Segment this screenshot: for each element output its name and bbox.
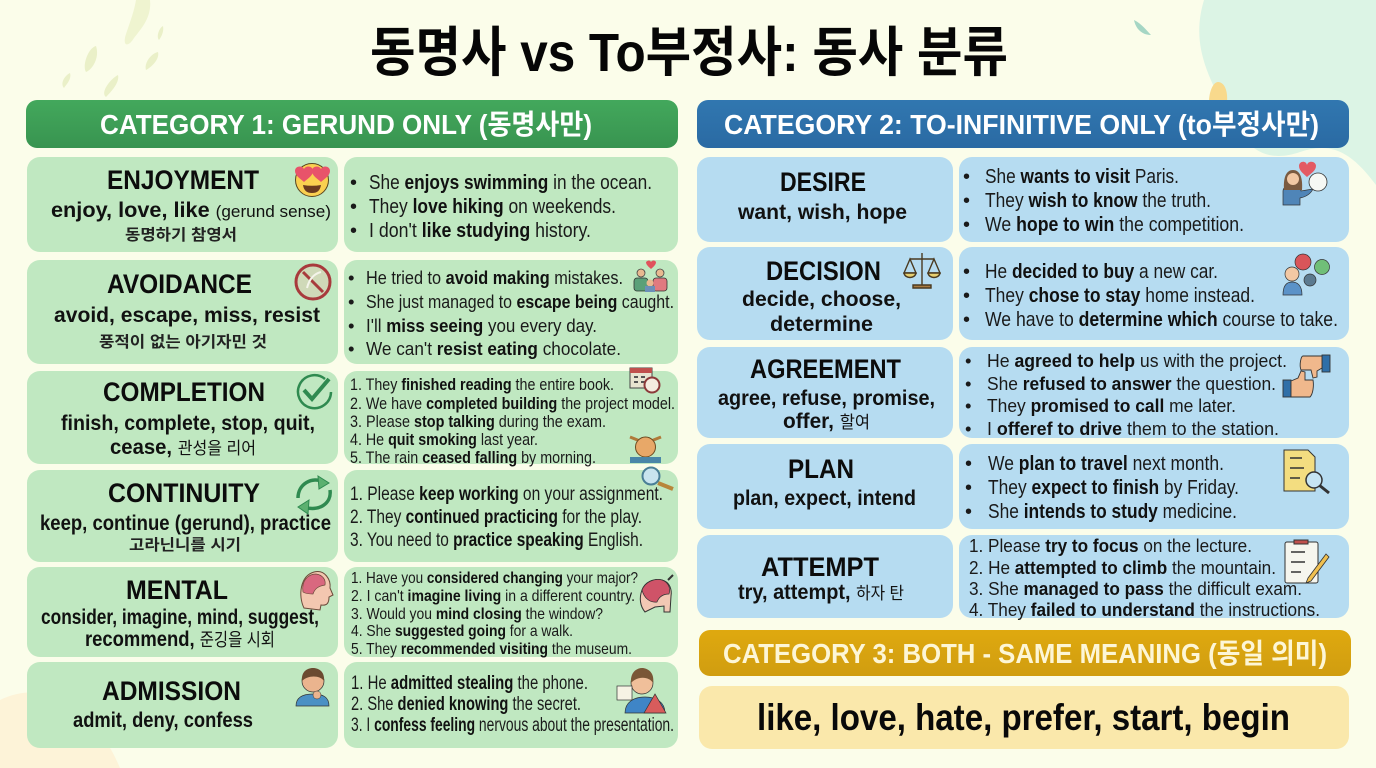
- row: enjoyment: I don't like studying history.: [369, 220, 591, 242]
- row: desire: •: [963, 214, 970, 236]
- row: admission: [27, 662, 678, 748]
- row: agreement: •: [965, 418, 971, 439]
- icon: clipboard and pencil: [1285, 540, 1329, 583]
- row: continuity: CONTINUITY: [108, 478, 260, 508]
- row: enjoyment: She enjoys swimming in the ocean.: [369, 172, 652, 194]
- row: decision: determine: [770, 312, 873, 336]
- row: desire: She wants to visit Paris.: [985, 166, 1179, 188]
- icon: brain head right: [640, 575, 673, 612]
- category 3 header: CATEGORY 3: BOTH - SAME MEANING (동일 의미): [723, 638, 1327, 669]
- row: admission: 2. She denied knowing the secret.: [351, 694, 581, 715]
- row: enjoyment: enjoy, love, like (gerund sense): [51, 198, 331, 222]
- icon: alarm figure: [630, 437, 661, 463]
- row: mental: 4. She suggested going for a walk.: [351, 623, 573, 640]
- row: agreement: She refused to answer the question.: [987, 373, 1276, 394]
- row: attempt: 1. Please try to focus on the lecture.: [969, 535, 1252, 556]
- icon: checklist with magnifier: [1284, 450, 1329, 493]
- row: continuity: [27, 468, 678, 562]
- row: mental: 2. I can't imagine living in a different country.: [351, 588, 635, 605]
- title: 동명사 vs To부정사: 동사 분류: [370, 23, 1008, 83]
- row: desire: [697, 157, 1349, 242]
- row: plan: We plan to travel next month.: [988, 453, 1224, 475]
- row: continuity: 1. Please keep working on your assignment.: [350, 484, 663, 505]
- row: attempt: [697, 535, 1349, 620]
- row: decision: •: [963, 285, 970, 307]
- panel: category 1 gerund only: [26, 100, 678, 748]
- row: mental: 3. Would you mind closing the window?: [351, 606, 603, 623]
- row: decision: [697, 247, 1349, 340]
- row: avoidance: He tried to avoid making mistakes.: [366, 267, 623, 288]
- row: agreement: AGREEMENT: [750, 354, 901, 384]
- row: plan: •: [965, 477, 972, 499]
- icon: person with choice marks: [1283, 254, 1330, 295]
- row: attempt: ATTEMPT: [761, 552, 879, 582]
- icon: man with note: [617, 668, 666, 713]
- row: plan: plan, expect, intend: [733, 486, 916, 510]
- category 3 header: [699, 630, 1351, 676]
- row: mental: 5. They recommended visiting the museum.: [351, 641, 632, 658]
- row: completion: COMPLETION: [103, 377, 265, 407]
- row: enjoyment: They love hiking on weekends.: [369, 196, 616, 218]
- row: avoidance: AVOIDANCE: [107, 269, 252, 299]
- row: agreement: [697, 347, 1349, 439]
- row: admission: 1. He admitted stealing the phone.: [351, 673, 588, 694]
- row: mental: consider, imagine, mind, suggest,: [41, 605, 319, 629]
- row: completion: finish, complete, stop, quit,: [61, 411, 315, 435]
- row: completion: 5. The rain ceased falling by morning.: [350, 448, 596, 467]
- row: desire: DESIRE: [780, 167, 866, 197]
- row: enjoyment: •: [350, 196, 357, 218]
- icon: magnifying glass: [642, 468, 673, 489]
- row: desire: We hope to win the competition.: [985, 214, 1244, 236]
- row: avoidance: She just managed to escape being caught.: [366, 291, 674, 312]
- row: completion: 2. We have completed building the project model.: [350, 394, 675, 413]
- icon: balance scale: [904, 253, 940, 288]
- row: avoidance: We can't resist eating chocolate.: [366, 338, 621, 359]
- row: completion: 4. He quit smoking last year.: [350, 430, 538, 449]
- row: attempt: 4. They failed to understand the instructions.: [969, 599, 1320, 620]
- row: agreement: •: [965, 395, 971, 416]
- row: enjoyment: •: [350, 172, 357, 194]
- panel: category 2 to-infinitive only: [697, 100, 1349, 620]
- row: continuity: 고라닌니를 시기: [129, 536, 241, 554]
- row: decision: He decided to buy a new car.: [985, 261, 1218, 283]
- row: attempt: try, attempt, 하자 탄: [738, 580, 904, 604]
- row: avoidance: avoid, escape, miss, resist: [54, 303, 320, 327]
- row: decision: decide, choose,: [742, 287, 901, 311]
- row: plan: She intends to study medicine.: [988, 501, 1237, 523]
- row: avoidance: [27, 260, 678, 364]
- row: agreement: They promised to call me later.: [987, 395, 1236, 416]
- row: attempt: 2. He attempted to climb the mountain.: [969, 557, 1276, 578]
- row: plan: [697, 444, 1349, 529]
- row: desire: They wish to know the truth.: [985, 190, 1211, 212]
- row: continuity: 3. You need to practice speaking English.: [350, 530, 643, 551]
- icon: man hand over mouth: [296, 668, 329, 706]
- row: mental: recommend, 준깅을 시회: [85, 627, 275, 651]
- row: mental: [27, 567, 678, 658]
- icon: calendar and clock: [630, 368, 660, 392]
- category 3 verbs box: [699, 686, 1349, 749]
- row: agreement: He agreed to help us with the project.: [987, 350, 1287, 371]
- category 2 header: [697, 100, 1349, 148]
- row: enjoyment: ENJOYMENT: [107, 165, 259, 195]
- category 2 header: CATEGORY 2: TO-INFINITIVE ONLY (to부정사만): [724, 109, 1319, 140]
- row: decision: DECISION: [766, 256, 881, 286]
- category 1 header: CATEGORY 1: GERUND ONLY (동명사만): [100, 109, 592, 140]
- row: completion: cease, 관성을 리어: [110, 435, 256, 459]
- row: agreement: I offeref to drive them to the station.: [987, 418, 1279, 439]
- icon: woman with heart and speech bubble: [1283, 162, 1327, 205]
- row: avoidance: 풍적이 없는 아기자민 것: [99, 333, 267, 351]
- row: admission: ADMISSION: [102, 676, 241, 706]
- row: continuity: keep, continue (gerund), practice: [40, 511, 331, 535]
- icon: green check circle: [298, 375, 331, 408]
- row: desire: •: [963, 190, 970, 212]
- panel: category 3 both same meaning: [699, 630, 1351, 749]
- row: agreement: offer, 할여: [783, 409, 870, 433]
- row: avoidance: I'll miss seeing you every day.: [366, 315, 597, 336]
- row: plan: They expect to finish by Friday.: [988, 477, 1239, 499]
- row: avoidance: •: [348, 291, 354, 312]
- row: agreement: •: [965, 350, 971, 371]
- row: mental: MENTAL: [126, 575, 228, 605]
- row: enjoyment: [27, 157, 678, 252]
- row: desire: want, wish, hope: [737, 200, 907, 224]
- row: agreement: agree, refuse, promise,: [718, 386, 935, 410]
- row: desire: •: [963, 166, 970, 188]
- category 3 verbs box: like, love, hate, prefer, start, begin: [757, 697, 1290, 738]
- row: avoidance: •: [348, 338, 354, 359]
- icon: family group: [634, 260, 667, 292]
- row: admission: 3. I confess feeling nervous about the presentation.: [351, 715, 674, 736]
- row: agreement: •: [965, 373, 971, 394]
- row: enjoyment: •: [350, 220, 357, 242]
- row: plan: •: [965, 453, 972, 475]
- icon: thumbs down and thumbs up: [1283, 355, 1330, 397]
- icon: cycle arrows: [298, 476, 330, 514]
- row: decision: We have to determine which course to take.: [985, 309, 1338, 331]
- row: enjoyment: 동명하기 참영서: [125, 226, 237, 244]
- row: admission: admit, deny, confess: [73, 708, 253, 732]
- category 1 header: [26, 100, 678, 148]
- row: avoidance: •: [348, 315, 354, 336]
- row: attempt: 3. She managed to pass the difficult exam.: [969, 578, 1302, 599]
- row: avoidance: •: [348, 267, 354, 288]
- row: decision: •: [963, 309, 970, 331]
- icon: head with brain: [301, 571, 333, 610]
- row: plan: PLAN: [788, 454, 854, 484]
- icon: heart eyes emoji: [295, 164, 330, 196]
- row: mental: 1. Have you considered changing your major?: [351, 570, 638, 587]
- row: completion: 3. Please stop talking during the exam.: [350, 412, 606, 431]
- row: decision: •: [963, 261, 970, 283]
- icon: prohibited sign: [296, 265, 330, 299]
- row: decision: They chose to stay home instead.: [985, 285, 1255, 307]
- row: continuity: 2. They continued practicing for the play.: [350, 507, 642, 528]
- row: completion: 1. They finished reading the entire book.: [350, 375, 614, 394]
- row: plan: •: [965, 501, 972, 523]
- row: completion: [27, 368, 678, 467]
